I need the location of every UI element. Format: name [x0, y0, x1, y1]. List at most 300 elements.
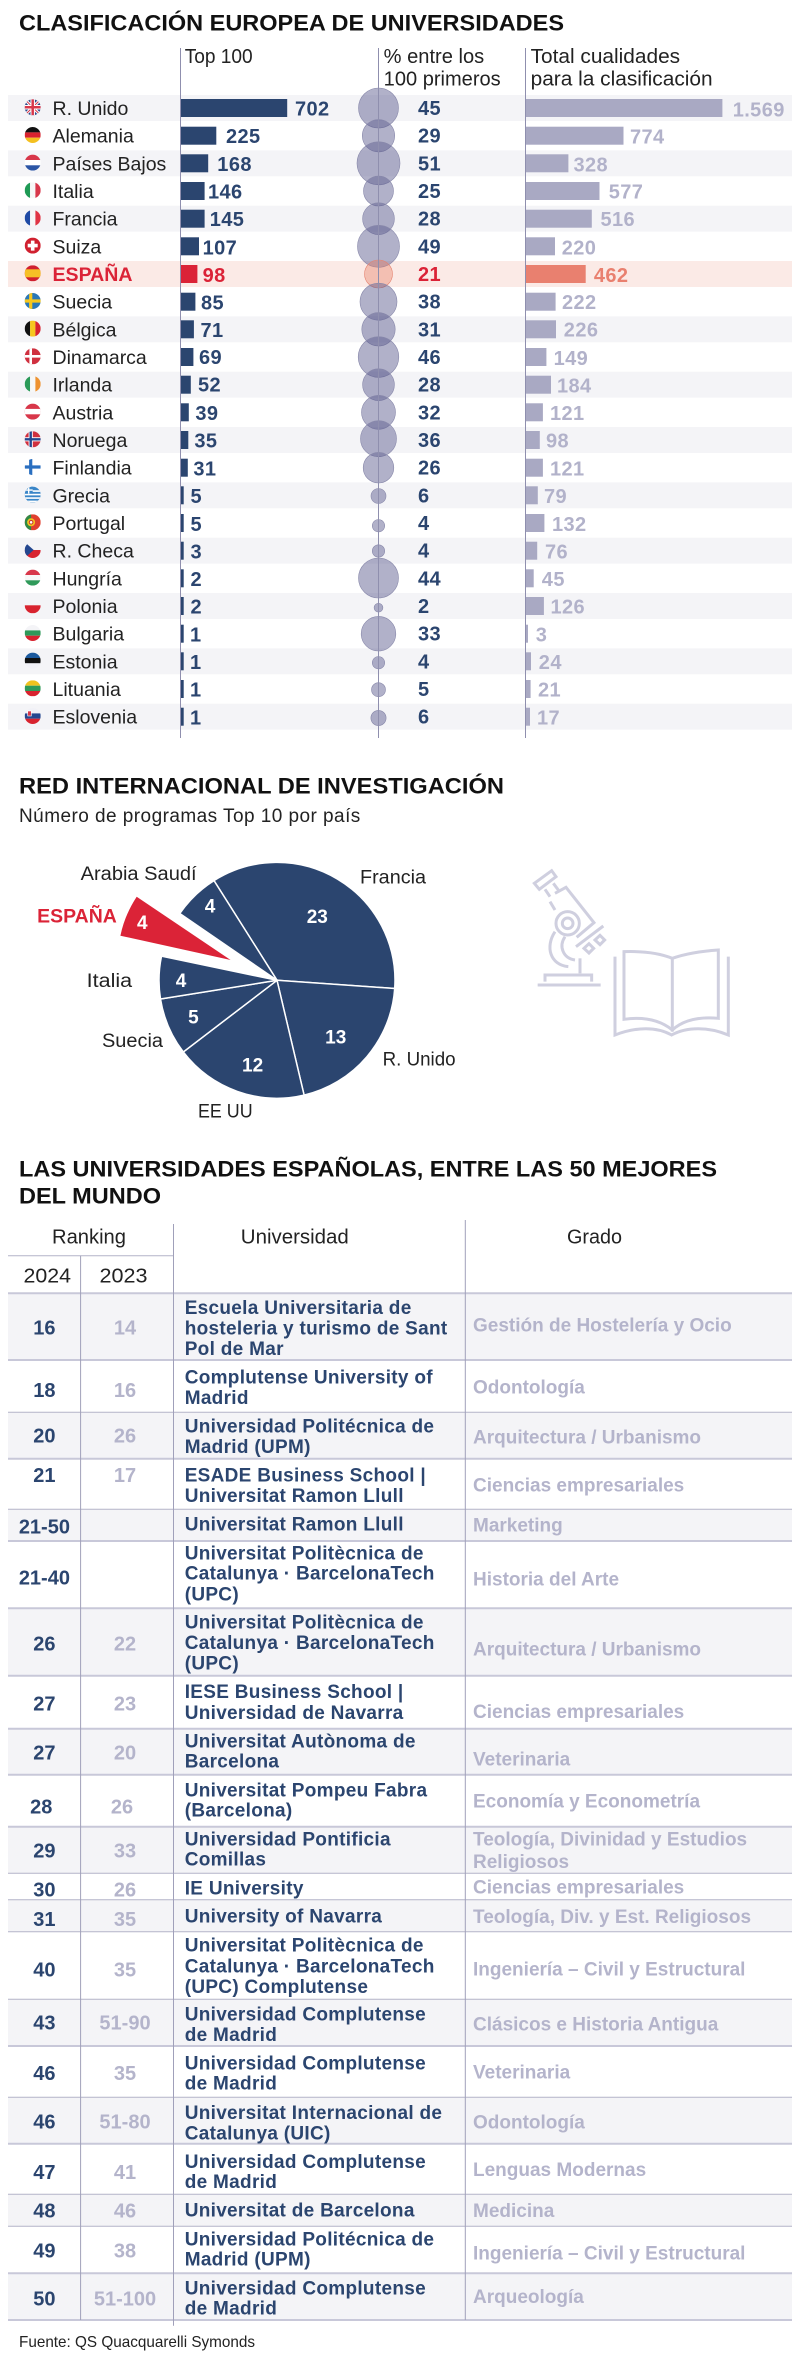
- row: Estonia: Estonia: [52, 651, 118, 673]
- table row: 43: 51-90: [99, 2012, 151, 2034]
- table row: 46 Veterinaria: 46: [33, 2063, 56, 2085]
- table row: 26: Arquitectura / Urbanismo: [473, 1639, 701, 1660]
- table row: 27 UAB: [33, 1731, 571, 1773]
- column headers: european ranking: [185, 46, 713, 90]
- row: Noruega: 98: [546, 430, 569, 452]
- row: Dinamarca: 69: [199, 347, 222, 369]
- row: Estonia: 1: [190, 652, 202, 674]
- title: clasificación europea: CLASIFICACIÓN EUROPEA DE UNIVERSIDADES: [19, 11, 564, 36]
- table row: 40: 35: [114, 1959, 136, 1981]
- row: Polonia: [24, 597, 584, 615]
- row: España (highlighted): 462: [594, 265, 628, 287]
- row: Bélgica: 31: [418, 319, 441, 341]
- table row: 21-50: Marketing: [473, 1515, 563, 1536]
- table row: 27 IESE: [33, 1682, 684, 1724]
- table row: 21: 17: [114, 1465, 136, 1487]
- table row: 27 UAB: Universitat Autònoma de: [185, 1731, 416, 1752]
- row: Finlandia: 26: [418, 458, 441, 480]
- table row: 30: [33, 1878, 684, 1901]
- row: España (highlighted): 21: [418, 264, 441, 286]
- table row: 40: Catalunya · BarcelonaTech: [185, 1956, 435, 1978]
- table row: 18: Madrid: [185, 1388, 249, 1409]
- table row: 16: 14: [114, 1318, 137, 1340]
- table row: 21-40: Catalunya · BarcelonaTech: [185, 1564, 435, 1585]
- table row: 46 UIC: Catalunya (UIC): [185, 2123, 331, 2144]
- row: Hungría: 44: [418, 568, 442, 590]
- table row: 47: Lenguas Modernas: [473, 2160, 646, 2181]
- table row: 21-40: Historia del Arte: [473, 1570, 619, 1591]
- row: R. Checa: 4: [418, 541, 430, 563]
- row: Austria: 121: [550, 403, 585, 425]
- row: Francia: Francia: [52, 209, 118, 231]
- table row: 29: Teología, Divinidad y Estudios: [473, 1830, 747, 1851]
- table row: 27 IESE: IESE Business School |: [185, 1682, 404, 1703]
- table row: 43: [33, 2004, 719, 2046]
- row: Portugal: 4: [418, 513, 430, 535]
- title: universidades españolas: DEL MUNDO: [19, 1184, 161, 1209]
- row: Alemania: 225: [226, 126, 261, 148]
- table row: 26: Catalunya · BarcelonaTech: [185, 1633, 435, 1654]
- row: Grecia: [24, 486, 566, 504]
- table row: 30: Ciencias empresariales: [473, 1878, 684, 1899]
- table row: 31: 35: [114, 1909, 136, 1931]
- subtitle: programas top 10: Número de programas Top 10 por país: [19, 806, 361, 827]
- row: Estonia: 4: [418, 651, 430, 673]
- table row: 29: Comillas: [185, 1850, 266, 1871]
- flag: Noruega: [25, 431, 41, 447]
- table row: 20: Universidad Politécnica de: [185, 1417, 434, 1438]
- table row: 29: 33: [114, 1840, 136, 1862]
- row: Grecia: Grecia: [52, 485, 110, 507]
- title: universidades españolas: [19, 1156, 717, 1209]
- row: R. Unido: 45: [418, 98, 441, 120]
- row: Lituania: Lituania: [52, 679, 121, 701]
- row: Francia: 28: [418, 209, 441, 231]
- table row: 40: Universitat Politècnica de: [185, 1936, 424, 1956]
- table row: 27 UAB: 20: [114, 1743, 136, 1765]
- table row: 27 IESE: Ciencias empresariales: [473, 1702, 684, 1723]
- table row: 27 IESE: Universidad de Navarra: [185, 1703, 404, 1724]
- table row: 46 UIC: Universitat Internacional de: [185, 2103, 442, 2124]
- row: Dinamarca: [24, 348, 587, 366]
- title: red internacional: RED INTERNACIONAL DE INVESTIGACIÓN: [19, 774, 504, 799]
- row: Finlandia: Finlandia: [52, 458, 132, 480]
- table row: 20: Madrid (UPM): [185, 1437, 311, 1458]
- flag: Polonia: [24, 605, 41, 614]
- row: España (highlighted): ESPAÑA: [52, 263, 132, 286]
- table row: 30: IE University: [185, 1878, 304, 1899]
- column headers: european ranking: Top 100: [185, 46, 253, 68]
- row: España (highlighted): [24, 264, 628, 283]
- table row: 21: 21: [33, 1465, 56, 1487]
- row: R. Checa: [24, 542, 567, 560]
- table row: 21-40: (UPC): [185, 1584, 239, 1605]
- table row: 40: (UPC) Complutense: [185, 1977, 368, 1998]
- row: Estonia: 24: [539, 652, 562, 674]
- row: Italia: [24, 182, 642, 200]
- table row: 18: 16: [114, 1380, 136, 1402]
- row: Alemania: [24, 126, 664, 145]
- row: Bélgica: [25, 319, 598, 342]
- row: Italia: 577: [609, 182, 643, 204]
- pie chart: programas por país: Francia: [360, 868, 426, 889]
- row: Bulgaria: [24, 624, 546, 644]
- pie chart: programas por país: 4: [205, 897, 216, 918]
- row: Suiza: Suiza: [52, 236, 101, 258]
- bubble column: % entre los 100 primeros: [357, 88, 400, 726]
- flag: Grecia: [25, 487, 41, 503]
- table row: 49: [33, 2229, 745, 2271]
- table row: 16: [33, 1298, 732, 1360]
- row: Irlanda: 52: [198, 375, 221, 397]
- row: Portugal: 5: [190, 514, 202, 536]
- table row: 28: Universitat Pompeu Fabra: [185, 1780, 427, 1801]
- row: Bélgica: Bélgica: [52, 319, 117, 341]
- table row: 40: 40: [33, 1959, 56, 1981]
- row: R. Unido: 1.569: [733, 100, 785, 122]
- row: R. Checa: R. Checa: [52, 541, 134, 563]
- table row: 48: 46: [114, 2201, 136, 2223]
- row: Austria: 39: [195, 403, 218, 425]
- flag: Bélgica: [25, 321, 41, 337]
- table header: Ranking: [52, 1227, 126, 1249]
- row: Austria: Austria: [52, 402, 113, 424]
- table row: 43: 43: [33, 2012, 56, 2034]
- pie chart: programas por país: 13: [325, 1028, 346, 1049]
- table row: 49: Universidad Politécnica de: [185, 2229, 434, 2250]
- table row: 46 UIC: Odontología: [473, 2113, 585, 2134]
- table header: Universidad: [241, 1227, 349, 1249]
- table row: 29: Religiosos: [473, 1852, 569, 1873]
- row: Suecia: Suecia: [52, 292, 112, 314]
- row: R. Unido: [24, 99, 784, 117]
- flag: Irlanda: [25, 376, 41, 392]
- table row: 49: Ingeniería – Civil y Estructural: [473, 2243, 745, 2264]
- table row: 31: University of Navarra: [185, 1907, 382, 1928]
- pie chart: programas por país: ESPAÑA: [37, 906, 117, 928]
- table row: 16: Gestión de Hostelería y Ocio: [473, 1316, 732, 1337]
- row: Francia: 145: [210, 209, 244, 231]
- table row: 29: 29: [33, 1840, 56, 1862]
- row: Noruega: Noruega: [52, 430, 127, 452]
- flag: Eslovenia: [25, 708, 41, 724]
- row: Dinamarca: 149: [554, 348, 588, 370]
- row: Suiza: 107: [203, 238, 237, 260]
- table row: 28: (Barcelona): [185, 1801, 293, 1822]
- table row: 48: Universitat de Barcelona: [185, 2201, 415, 2222]
- row: Grecia: 6: [418, 485, 430, 507]
- row: Bélgica: 226: [564, 320, 598, 342]
- row: Italia: 25: [418, 181, 441, 203]
- table row: 47: [33, 2152, 646, 2193]
- pie chart: programas por país: Suecia: [102, 1031, 163, 1052]
- table row: 26: [33, 1613, 701, 1674]
- table row: 46 Veterinaria: Veterinaria: [473, 2063, 571, 2084]
- row: Hungría: Hungría: [52, 568, 122, 590]
- table row: 28: Economía y Econometría: [473, 1791, 700, 1812]
- table row: 28: 28: [30, 1797, 52, 1819]
- table row: 49: 38: [114, 2240, 136, 2262]
- row: Irlanda: Irlanda: [52, 375, 112, 397]
- pie chart: programas por país: [37, 862, 456, 1123]
- pie chart: programas por país: Italia: [87, 971, 133, 992]
- table row: 27 IESE: 27: [33, 1694, 56, 1716]
- row: Austria: 32: [418, 402, 441, 424]
- table row: 26: 26: [33, 1633, 56, 1655]
- table row: 48: [33, 2201, 555, 2223]
- row: Eslovenia: 1: [190, 708, 202, 730]
- table header: [24, 1227, 622, 1288]
- row: Bélgica: 71: [200, 320, 224, 342]
- table row: 21: ESADE Business School |: [185, 1466, 426, 1487]
- row: Eslovenia: [25, 707, 560, 730]
- row: Países Bajos: 328: [574, 154, 608, 176]
- row: Alemania: Alemania: [52, 126, 134, 148]
- flag: Países Bajos: [25, 155, 41, 171]
- table row: 40: Ingeniería – Civil y Estructural: [473, 1960, 745, 1981]
- table row: 16: hosteleria y turismo de Sant: [185, 1318, 448, 1340]
- pie chart: programas por país: Arabia Saudí: [81, 864, 197, 885]
- flag: Francia: [25, 210, 41, 226]
- flag: Austria: [25, 404, 41, 420]
- table row: 49: Madrid (UPM): [185, 2250, 311, 2271]
- flag: Lituania: [25, 680, 41, 696]
- flag: Bulgaria: [25, 625, 41, 641]
- table row: 31: Teología, Div. y Est. Religiosos: [473, 1907, 751, 1928]
- pie chart: programas por país: 23: [307, 907, 328, 928]
- table row: 21: Universitat Ramon Llull: [185, 1486, 404, 1507]
- row: Finlandia: [24, 458, 584, 477]
- row: Italia: 146: [208, 182, 243, 204]
- column headers: european ranking: % entre los: [384, 46, 484, 68]
- row: Dinamarca: 46: [418, 347, 441, 369]
- table row: 30: 26: [114, 1879, 136, 1901]
- table row: 50: Arqueología: [473, 2287, 584, 2308]
- table row: 46 UIC: 46: [33, 2112, 56, 2134]
- table row: 20: [33, 1417, 701, 1458]
- row: Suecia: 222: [562, 292, 597, 314]
- row: Lituania: 1: [190, 680, 202, 702]
- flag: Finlandia: [25, 459, 41, 475]
- row: Austria: [24, 403, 584, 422]
- row: Bulgaria: 3: [536, 624, 547, 646]
- row: Lituania: 21: [538, 680, 561, 702]
- flag: Suiza: [25, 238, 41, 254]
- row: Bulgaria: Bulgaria: [52, 624, 124, 646]
- pie chart: programas por país: 12: [242, 1056, 263, 1077]
- table row: 43: Universidad Complutense: [185, 2004, 426, 2025]
- row: Países Bajos: 51: [418, 153, 441, 175]
- flag: Alemania: [25, 127, 41, 143]
- table row: 26: (UPC): [185, 1653, 239, 1674]
- table row: 46 UIC: [33, 2103, 585, 2144]
- title: universidades españolas: LAS UNIVERSIDADES ESPAÑOLAS, ENTRE LAS 50 MEJORES: [19, 1156, 717, 1181]
- table row: 21-40: Universitat Politècnica de: [185, 1543, 424, 1564]
- pie chart: programas por país: EE UU: [198, 1102, 253, 1123]
- row: Eslovenia: 17: [537, 708, 560, 730]
- row: Dinamarca: Dinamarca: [52, 347, 147, 369]
- table row: 46 Veterinaria: [33, 2053, 571, 2095]
- table row: 47: 47: [33, 2162, 56, 2184]
- table row: 27 UAB: Veterinaria: [473, 1749, 571, 1770]
- pie chart: programas por país: R. Unido: [383, 1049, 456, 1070]
- flag: Hungría: [25, 570, 41, 586]
- table row: 18: Odontología: [473, 1378, 585, 1399]
- row: Polonia: 126: [550, 596, 585, 618]
- flag: España: [25, 265, 41, 281]
- row: Eslovenia: Eslovenia: [52, 707, 137, 729]
- row: R. Unido: 702: [295, 98, 330, 120]
- row: Polonia: Polonia: [52, 596, 118, 618]
- table row: 43: de Madrid: [185, 2025, 277, 2046]
- row: Suecia: [24, 292, 596, 311]
- row: Noruega: [24, 431, 568, 451]
- row: R. Checa: 3: [190, 542, 202, 564]
- table row: 21-50: 21-50: [19, 1517, 70, 1539]
- pie chart: programas por país: 5: [188, 1008, 199, 1029]
- table row: 18: 18: [33, 1380, 56, 1402]
- table row: 50: de Madrid: [185, 2299, 277, 2320]
- table row: 16: Pol de Mar: [185, 1339, 284, 1360]
- table header: 2023: [100, 1266, 148, 1288]
- row: Alemania: 774: [630, 127, 665, 149]
- row: Grecia: 79: [544, 486, 567, 508]
- table row: 16: Escuela Universitaria de: [185, 1298, 412, 1319]
- row: Irlanda: [24, 376, 591, 394]
- icon: microscope: [534, 871, 605, 985]
- row: Portugal: 132: [552, 514, 587, 536]
- table row: 50: 50: [33, 2288, 56, 2310]
- row: Suiza: [24, 237, 595, 256]
- table row: 29: Universidad Pontificia: [185, 1829, 391, 1850]
- table row: 21-50: Universitat Ramon Llull: [185, 1514, 404, 1535]
- row: Francia: [24, 210, 634, 228]
- table row: 29: [33, 1829, 747, 1873]
- row: Portugal: Portugal: [52, 513, 125, 535]
- row: Hungría: 45: [542, 569, 565, 591]
- row: Estonia: [25, 651, 562, 674]
- flag: Dinamarca: [25, 348, 41, 364]
- table row: 20: 26: [114, 1426, 136, 1448]
- row: Grecia: 5: [190, 486, 202, 508]
- table row: 27 UAB: 27: [33, 1743, 56, 1765]
- column headers: european ranking: 100 primeros: [384, 68, 501, 90]
- row: Polonia: 2: [418, 596, 430, 618]
- row: Finlandia: 31: [193, 458, 216, 480]
- row: Irlanda: 184: [557, 376, 592, 398]
- row: Bulgaria: 1: [190, 624, 202, 646]
- table row: 27 IESE: 23: [114, 1694, 136, 1716]
- source note: Fuente: QS Quacquarelli Symonds: [19, 2334, 255, 2351]
- row: Lituania: [25, 679, 561, 702]
- row: Noruega: 35: [194, 430, 217, 452]
- row: Suiza: 220: [562, 238, 596, 260]
- row: Eslovenia: 6: [418, 707, 430, 729]
- row: Suecia: 38: [418, 292, 441, 314]
- flag: Portugal: [25, 514, 41, 530]
- row: Irlanda: 28: [418, 375, 441, 397]
- table row: 28: [30, 1780, 700, 1822]
- row: Francia: 516: [600, 209, 635, 231]
- table row: 18: Complutense University of: [185, 1368, 433, 1389]
- table row: 21: Ciencias empresariales: [473, 1476, 684, 1497]
- row: Bulgaria: 33: [418, 624, 441, 646]
- table row: 28: 26: [111, 1797, 133, 1819]
- table row: 43: Clásicos e Historia Antigua: [473, 2015, 719, 2036]
- row: Hungría: 2: [190, 569, 202, 591]
- table row: 21-40: [19, 1543, 619, 1605]
- table row: 46 Veterinaria: Universidad Complutense: [185, 2053, 426, 2074]
- row: R. Checa: 76: [545, 542, 568, 564]
- table row: 46 Veterinaria: 35: [114, 2063, 136, 2085]
- row: Italia: Italia: [52, 181, 94, 203]
- table row: 50: Universidad Complutense: [185, 2278, 426, 2299]
- flag: Italia: [25, 182, 41, 198]
- row: R. Unido: R. Unido: [52, 98, 129, 120]
- table row: 20: 20: [33, 1426, 56, 1448]
- table row: 48: 48: [33, 2201, 56, 2223]
- table row: 47: 41: [114, 2162, 136, 2184]
- row: Alemania: 29: [418, 126, 441, 148]
- row: Finlandia: 121: [550, 458, 585, 480]
- row: Países Bajos: [25, 154, 607, 174]
- table row: 18: [33, 1368, 585, 1409]
- row: Suiza: 49: [418, 236, 441, 258]
- icon: open book: [615, 950, 728, 1035]
- row: Suecia: 85: [201, 292, 224, 314]
- table row: 20: Arquitectura / Urbanismo: [473, 1427, 701, 1448]
- table row: 30: 30: [33, 1879, 56, 1901]
- table row: 50: 51-100: [94, 2288, 156, 2310]
- table row: 47: Universidad Complutense: [185, 2152, 426, 2173]
- row: España (highlighted): 98: [203, 265, 226, 287]
- pie chart: programas por país: 4: [176, 971, 187, 992]
- table row: 31: [33, 1907, 751, 1931]
- table row: 21-40: 21-40: [19, 1567, 70, 1589]
- row: Países Bajos: Países Bajos: [52, 153, 167, 175]
- table row: 46 Veterinaria: de Madrid: [185, 2074, 277, 2095]
- pie chart: programas por país: 4: [137, 913, 148, 934]
- table row: 49: 49: [33, 2240, 56, 2262]
- table row: 16: 16: [33, 1318, 56, 1340]
- table row: 26: 22: [114, 1633, 136, 1655]
- table header: 2024: [24, 1266, 71, 1288]
- table row: 47: de Madrid: [185, 2172, 277, 2193]
- flag: República Checa: [25, 542, 41, 558]
- table row: 46 UIC: 51-80: [99, 2112, 151, 2134]
- column headers: european ranking: para la clasificación: [531, 68, 713, 90]
- row: Portugal: [24, 514, 586, 534]
- row: Lituania: 5: [418, 679, 430, 701]
- table row: 26: Universitat Politècnica de: [185, 1613, 424, 1634]
- table row: 21: [33, 1465, 684, 1507]
- row: Hungría: [25, 568, 565, 591]
- flag: Estonia: [25, 653, 41, 669]
- column headers: european ranking: Total cualidades: [531, 46, 680, 68]
- flag: Reino Unido: [25, 99, 41, 115]
- row: Noruega: 36: [418, 430, 441, 452]
- table row: 48: Medicina: [473, 2201, 555, 2222]
- table row: 21-50: [19, 1514, 563, 1539]
- table row: 31: 31: [33, 1909, 56, 1931]
- table row: 40: [33, 1936, 745, 1998]
- row: Polonia: 2: [190, 596, 202, 618]
- table header: Grado: [567, 1227, 622, 1249]
- flag: Suecia: [25, 293, 41, 309]
- table row: 27 UAB: Barcelona: [185, 1752, 279, 1773]
- row: Países Bajos: 168: [217, 154, 252, 176]
- table row: 50: [33, 2278, 584, 2320]
